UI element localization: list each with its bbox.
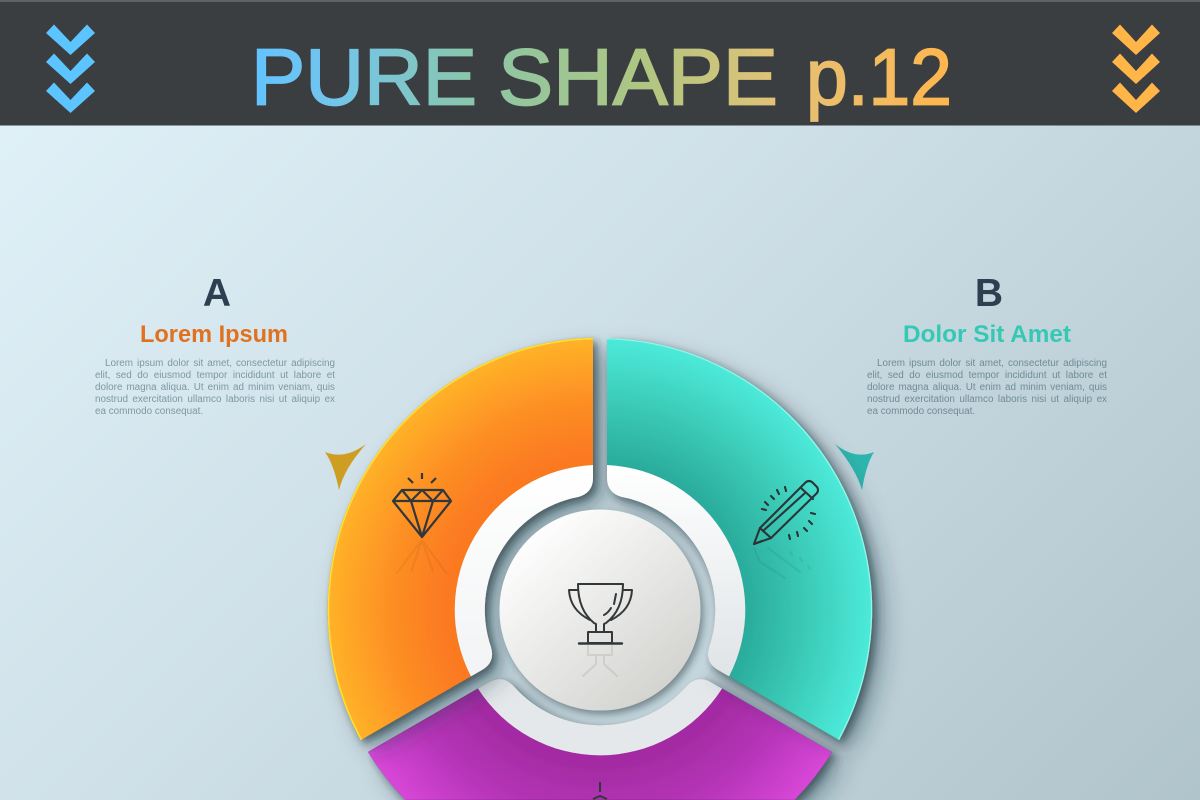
icon: blue chevrons — [46, 24, 95, 113]
text block A: dolore magna aliqua. Ut enim ad minim veniam, quis — [95, 382, 335, 393]
icon: orange chevrons — [1112, 24, 1160, 113]
arrow: teal pointer — [835, 444, 874, 490]
icon: partial diamond C — [593, 782, 607, 799]
text block B — [867, 358, 1107, 417]
text block B: Lorem ipsum dolor sit amet, consectetur adipiscing — [877, 358, 1107, 369]
title: SHAPE — [498, 32, 778, 122]
central channel — [475, 485, 725, 735]
heading: A: A — [203, 272, 231, 315]
segment: orange A — [328, 338, 593, 740]
subheading: Dolor Sit Amet: Dolor Sit Amet — [903, 321, 1071, 348]
center circle — [500, 510, 700, 710]
title — [251, 32, 952, 122]
subheading: Lorem Ipsum: Lorem Ipsum — [140, 321, 288, 348]
text block B: nostrud exercitation ullamco laboris nisi ut aliquip ex — [867, 394, 1107, 405]
title: p.12 — [806, 32, 952, 122]
header bar — [0, 0, 1200, 126]
text block A: nostrud exercitation ullamco laboris nisi ut aliquip ex — [95, 394, 335, 405]
text block A: elit, sed do eiusmod tempor incididunt ut labore et — [95, 370, 335, 381]
text block A: Lorem ipsum dolor sit amet, consectetur adipiscing — [105, 358, 335, 369]
icon: diamond — [393, 473, 451, 574]
arrow: gold pointer — [325, 444, 366, 490]
text block B: elit, sed do eiusmod tempor incididunt ut labore et — [867, 370, 1107, 381]
text block A: ea commodo consequat. — [95, 406, 203, 417]
text block B: dolore magna aliqua. Ut enim ad minim veniam, quis — [867, 382, 1107, 393]
icon: pencil — [754, 481, 818, 578]
text block A — [95, 358, 335, 417]
title: PURE — [251, 32, 477, 122]
segment: purple C — [368, 583, 832, 800]
text block B: ea commodo consequat. — [867, 406, 975, 417]
segment: teal B — [607, 338, 872, 740]
heading: B: B — [975, 272, 1003, 315]
icon: trophy — [569, 584, 632, 676]
